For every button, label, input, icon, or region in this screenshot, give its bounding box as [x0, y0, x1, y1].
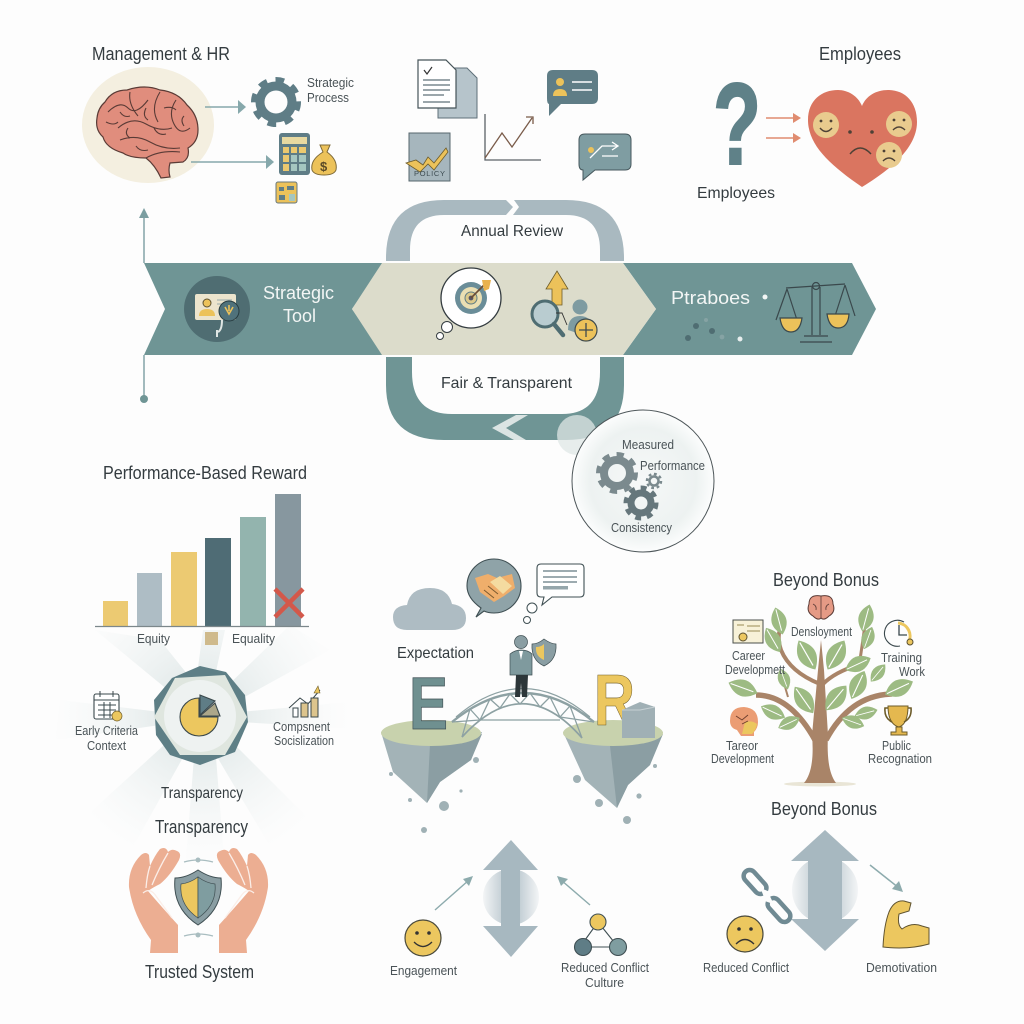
illustration: tree [726, 603, 916, 786]
heading: beyond bonus: Beyond Bonus [771, 799, 877, 819]
rays: glow beams [55, 625, 370, 880]
label: component socialization [273, 720, 334, 748]
panel: beyond bonus demotivation [703, 799, 937, 975]
label: tareer development: Tareor [726, 739, 758, 753]
icon: money bag: $ [320, 159, 328, 174]
label: fair and transparent: Fair & Transparent [441, 375, 573, 392]
letter: R: R [594, 661, 635, 741]
label: consistency: Consistency [611, 521, 673, 535]
label: reduced conflict: Reduced Conflict [703, 961, 789, 975]
label: strategic tool: Tool [283, 305, 316, 326]
icon: large gear [599, 455, 635, 491]
label: expectation: Expectation [397, 645, 474, 662]
panel: expectation bridge [381, 559, 663, 833]
loop: annual review arch [386, 200, 624, 261]
label: reduced conflict culture: Reduced Conflict [561, 961, 649, 975]
label: early criteria context: Context [87, 739, 126, 753]
arrow: question to heart upper [766, 113, 801, 123]
label: reduced conflict culture: Culture [585, 976, 624, 990]
illustration: right island [563, 720, 663, 808]
label: reduced conflict culture [561, 961, 649, 990]
label: early criteria context [75, 724, 138, 753]
icon: head with brain [730, 707, 758, 736]
panel: beyond bonus tree [711, 570, 932, 786]
icon: brain on cream halo [82, 67, 214, 183]
panel: trusted system [129, 817, 268, 982]
icon: person with plus [568, 300, 597, 341]
arrow: to arm [870, 865, 903, 892]
label: career development: Career [732, 649, 765, 663]
icon: policy board: POLICY [414, 169, 445, 178]
icon: question mark: ? [713, 59, 761, 189]
icon: front document [418, 60, 456, 108]
letter: E: E [409, 662, 448, 745]
icon: handshake bubble [467, 559, 521, 617]
label: early criteria context: Early Criteria [75, 724, 138, 738]
heading: transparency: Transparency [155, 817, 248, 837]
icon: heart with faces [808, 90, 917, 187]
icon: smiley [405, 920, 441, 956]
icon: caring hands [129, 848, 268, 953]
icon: person shield [532, 639, 556, 666]
label: training work [881, 651, 926, 679]
panel: transparency hub [55, 625, 370, 880]
label: public recognition: Public [882, 739, 911, 753]
bar chart [95, 494, 309, 626]
label: tareer development: Development [711, 752, 774, 766]
heading: employees: Employees [819, 44, 901, 64]
label: strategic tool: Strategic [263, 282, 334, 303]
label: performance: Performance [640, 459, 705, 473]
icon: money bag [312, 145, 336, 175]
arrow: engagement up [435, 876, 473, 910]
chart: rising line [485, 114, 541, 160]
label: public recognition: Recognation [868, 752, 932, 766]
arrow: brain to budget [191, 155, 274, 169]
icon: calendar [94, 691, 122, 721]
icon: small planning board [276, 182, 297, 203]
icon: sad face [727, 916, 763, 952]
banner: right arrow [623, 263, 876, 355]
icon: gear [254, 80, 298, 124]
label: engagement: Engagement [390, 964, 457, 978]
illustration: left island [381, 720, 482, 803]
label: employees: Employees [697, 185, 775, 202]
arrow: vertical up [139, 208, 149, 263]
label: densloyment: Densloyment [791, 625, 852, 639]
icon: certificate [733, 620, 763, 643]
icon: small gear [647, 474, 661, 488]
legend: equity: Equity [137, 632, 171, 646]
icon cluster: policy documents [406, 60, 631, 181]
panel: management and HR [82, 44, 354, 203]
icon: top brain [808, 596, 834, 619]
shape: glowing orb [792, 857, 858, 923]
marker: vertical down with dot [140, 355, 148, 403]
label: strategic tool [263, 282, 334, 326]
arrow: culture up [557, 876, 590, 905]
label: annual review: Annual Review [461, 223, 563, 240]
icon: red cross [275, 589, 303, 617]
panel: measured performance circle [572, 410, 714, 552]
icon: profile card [184, 276, 250, 342]
label: career development: Developmett [725, 663, 785, 677]
marker: floating rocks [389, 757, 657, 833]
label: measured: Measured [622, 438, 674, 452]
icon: flexed arm [883, 901, 929, 948]
arrow: double vertical [791, 830, 859, 951]
icon: calculator [279, 133, 310, 175]
icon: lower gear [626, 488, 656, 518]
panel: engagement and culture [390, 840, 649, 990]
loop: fair and transparent arch [386, 357, 624, 440]
icon: back document [438, 68, 477, 118]
icon: broken chain [741, 868, 793, 924]
panel: performance-based reward chart [95, 463, 309, 646]
icon: trophy [885, 706, 911, 735]
heading: management and HR: Management & HR [92, 44, 230, 64]
label: component socialization: Compsnent [273, 720, 330, 734]
label: demotivation: Demotivation [866, 961, 937, 975]
arrow: question to heart lower [766, 133, 801, 143]
icon: cube [622, 702, 655, 738]
panel: central process banner [139, 200, 876, 455]
marker: right banner dots [685, 294, 768, 342]
illustration: bridge [452, 688, 594, 738]
heading: performance-based reward: Performance-Based Reward [103, 463, 307, 483]
icon: magnifier [532, 301, 567, 335]
icon: pie chart [180, 695, 220, 736]
label: right banner text: Ptraboes [671, 287, 750, 308]
panel: employees [697, 44, 917, 202]
label: tareer development [711, 739, 774, 766]
label: career development [725, 649, 785, 677]
icon: growth chart [289, 686, 320, 717]
banner: left arrow [144, 263, 384, 355]
icon: text bubble [537, 564, 584, 605]
label: component socialization: Socislization [274, 734, 334, 748]
banner: centre hexagon [352, 263, 656, 355]
icon: cloud [393, 588, 466, 630]
icon: up arrow [546, 271, 568, 305]
label: training work: Work [899, 665, 926, 679]
arrow: brain to process [205, 100, 246, 114]
icon: policy board [406, 133, 450, 181]
icon: clock [884, 620, 913, 646]
heading: beyond bonus: Beyond Bonus [773, 570, 879, 590]
label: process: Process [307, 91, 349, 105]
label: strategic process: Strategic [307, 76, 354, 90]
icon: loop chevron [492, 415, 528, 440]
label: training work: Training [881, 651, 922, 665]
label: trusted system: Trusted System [145, 962, 254, 982]
icon: thought dots [524, 603, 537, 624]
icon: network [574, 914, 626, 956]
icon: faceted octagon [154, 666, 248, 765]
icon: target thought bubble [436, 268, 501, 340]
label: transparency: Transparency [161, 785, 243, 802]
marker: loop bubble [557, 415, 597, 455]
icon: person speech bubble [547, 70, 598, 116]
legend: swatch [205, 632, 218, 645]
shape: glowing orb [483, 869, 539, 925]
label: public recognition [868, 739, 932, 766]
icon: shield [175, 870, 221, 925]
arrow: double vertical [483, 840, 538, 957]
icon: workflow speech bubble [579, 134, 631, 180]
icon: balance scale [776, 282, 855, 342]
legend: equality: Equality [232, 632, 276, 646]
illustration: person on bridge [510, 636, 532, 697]
